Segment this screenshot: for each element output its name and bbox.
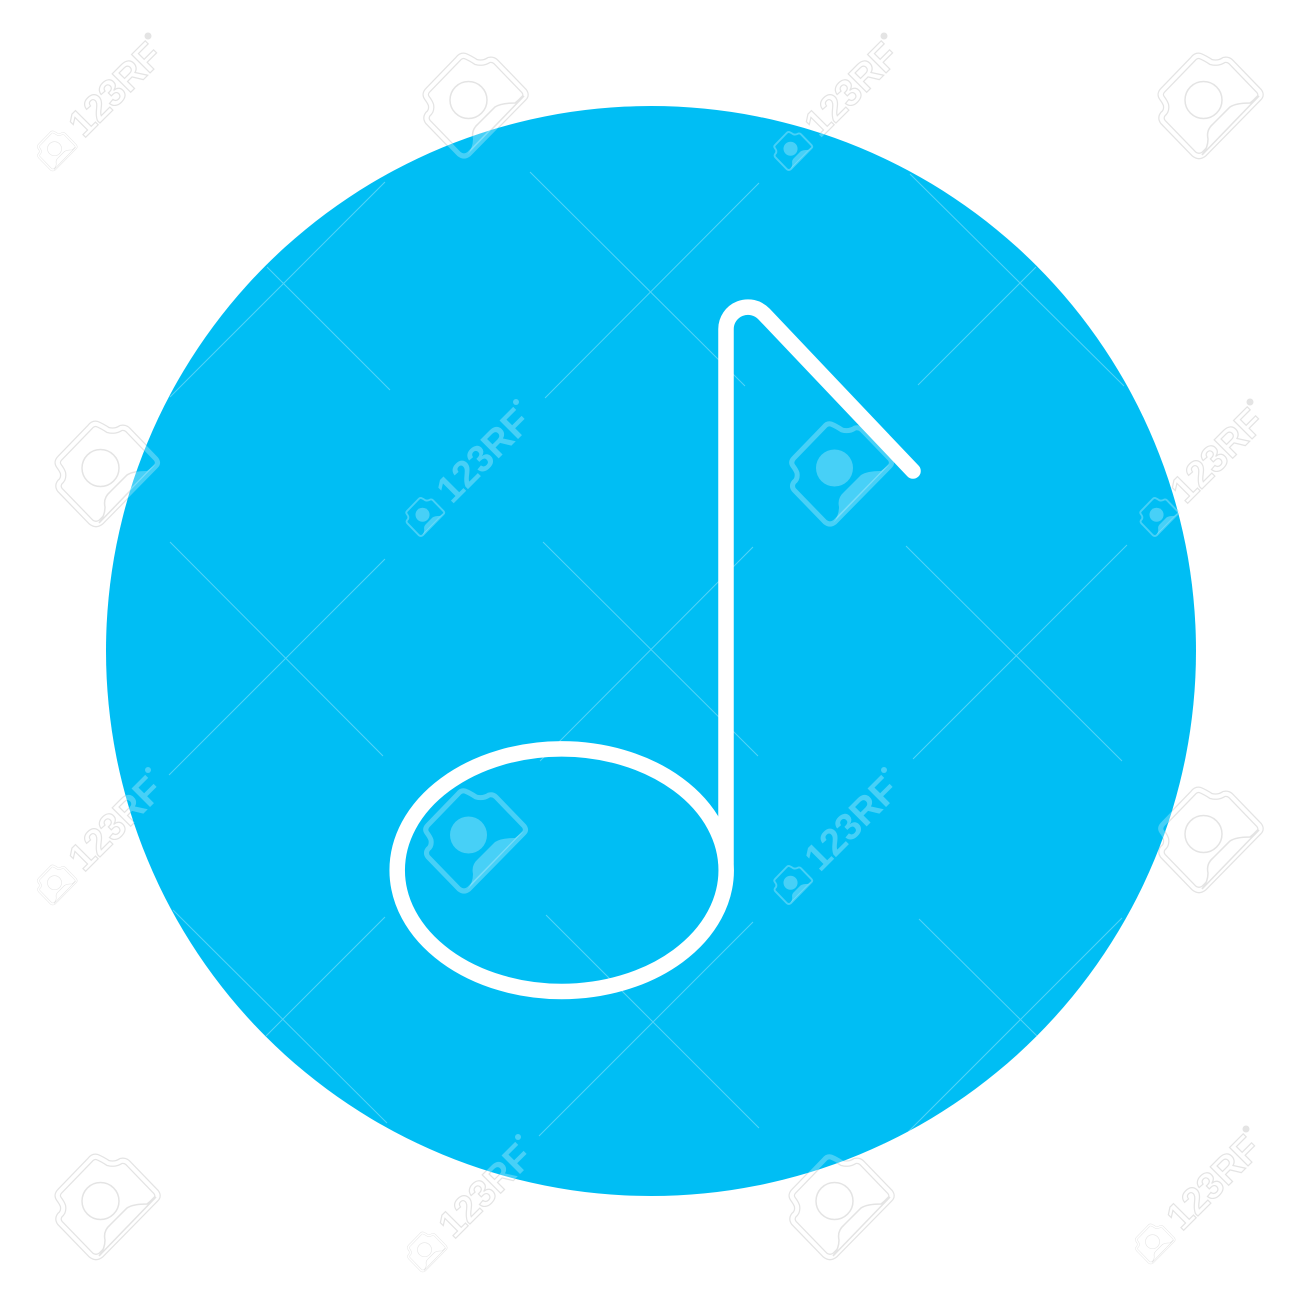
watermark stamp: bottom center [792, 1157, 892, 1257]
watermark stamp: top center [448, 128, 498, 159]
watermark mark: top left: 123RF [61, 35, 171, 145]
watermark mark: right: 123RF [1163, 401, 1273, 511]
watermark mark: center left: 123RF [429, 401, 539, 511]
watermark stamp: left [58, 424, 158, 524]
watermark mark: bottom center: 123RF [431, 1136, 541, 1246]
watermark stamp: right [1158, 811, 1172, 838]
watermark mark: lower center [774, 767, 907, 904]
watermark mark: top center: 123RF [797, 35, 907, 145]
watermark layer on blue circle [126, 128, 1178, 1179]
watermark mark: lower left [38, 766, 171, 904]
watermark mark: bottom center: 123RF [431, 1136, 541, 1246]
watermark stamp: inside note head [426, 791, 526, 891]
watermark stamp: top right [1161, 56, 1260, 156]
watermark mark: right [1139, 497, 1178, 537]
note head [397, 749, 726, 992]
watermark stamp: top center [426, 56, 526, 156]
watermark mark: bottom center [408, 1134, 541, 1271]
watermark mark: top center: 123RF [797, 35, 907, 145]
watermark stamp: bottom center [808, 1154, 844, 1173]
watermark mark: lower left: 123RF [61, 769, 171, 879]
watermark mark: bottom right: 123RF [1159, 1128, 1269, 1238]
watermark mark: lower left: 123RF [61, 769, 171, 879]
watermark mark: lower center: 123RF [797, 769, 907, 879]
watermark mark: top center [774, 32, 907, 170]
icon: music note [397, 307, 913, 991]
watermark mark: top left [38, 32, 171, 170]
watermark mark: center left [406, 399, 539, 536]
blue circle background [106, 106, 1196, 1196]
watermark mark: bottom right [1136, 1126, 1269, 1263]
watermark stamp: left [128, 446, 160, 498]
watermark mark: right: 123RF [1163, 401, 1273, 511]
watermark mark: top center [773, 131, 824, 171]
watermark stamp: bottom left [58, 1157, 158, 1257]
watermark mark: right [1140, 398, 1273, 536]
watermark stamp: right [1161, 790, 1260, 890]
watermark mark: bottom center [486, 1134, 526, 1179]
watermark stamp: center right [792, 424, 892, 524]
note stem and flag [726, 307, 913, 862]
watermark mark: lower left [126, 767, 156, 823]
